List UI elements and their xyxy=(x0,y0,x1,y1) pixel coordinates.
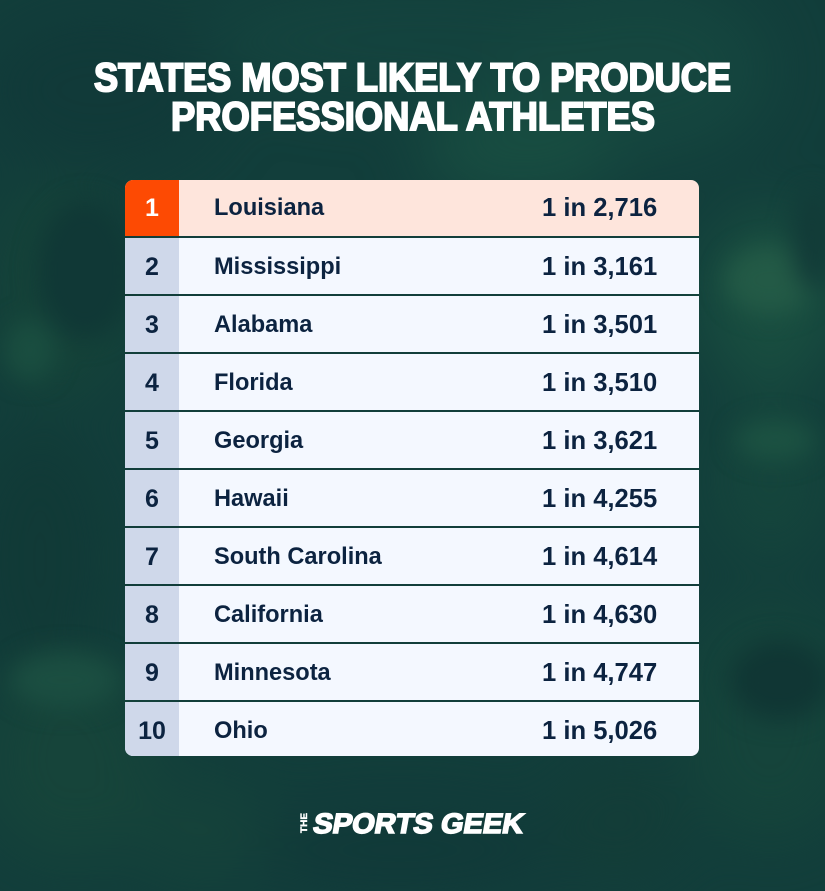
row 5: Georgia xyxy=(125,412,699,468)
row 4: Florida: Florida xyxy=(214,370,293,396)
row 4: Florida: 4 xyxy=(145,369,159,397)
row 10: Ohio: 1 in 5,026 xyxy=(542,717,657,745)
row 8: California xyxy=(125,586,699,642)
row 6: Hawaii xyxy=(125,470,699,526)
row 9: Minnesota: Minnesota xyxy=(214,660,331,686)
row 8: California: 1 in 4,630 xyxy=(542,601,657,629)
row 10: Ohio xyxy=(125,702,699,756)
row 5: Georgia: 1 in 3,621 xyxy=(542,427,657,455)
row 2: Mississippi: Mississippi xyxy=(214,254,341,280)
row 2: Mississippi xyxy=(125,238,699,294)
row 3: Alabama: Alabama xyxy=(214,312,312,338)
row 10: Ohio: 10 xyxy=(138,717,166,745)
row 7: South Carolina: South Carolina xyxy=(214,544,382,570)
title: PROFESSIONAL ATHLETES xyxy=(171,95,655,139)
row 6: Hawaii: 6 xyxy=(145,485,159,513)
logo: The Sports Geek: THE xyxy=(299,813,309,833)
row 1: Louisiana: 1 xyxy=(145,194,159,222)
row 8: California: 8 xyxy=(145,601,159,629)
row 6: Hawaii: 1 in 4,255 xyxy=(542,485,657,513)
row 8: California: California xyxy=(214,602,323,628)
row 4: Florida: 1 in 3,510 xyxy=(542,369,657,397)
ranking table xyxy=(125,180,699,756)
row 1: Louisiana xyxy=(125,180,699,236)
logo: The Sports Geek: SPORTS GEEK xyxy=(311,807,527,839)
title: STATES MOST LIKELY TO PRODUCE xyxy=(94,56,731,100)
row 4: Florida xyxy=(125,354,699,410)
row 3: Alabama: 1 in 3,501 xyxy=(542,311,657,339)
row 6: Hawaii: Hawaii xyxy=(214,486,289,512)
row 9: Minnesota: 1 in 4,747 xyxy=(542,659,657,687)
row 9: Minnesota xyxy=(125,644,699,700)
row 7: South Carolina: 1 in 4,614 xyxy=(542,543,657,571)
row 7: South Carolina xyxy=(125,528,699,584)
row 10: Ohio: Ohio xyxy=(214,718,268,744)
row 2: Mississippi: 2 xyxy=(145,253,159,281)
row 1: Louisiana: 1 in 2,716 xyxy=(542,194,657,222)
row 9: Minnesota: 9 xyxy=(145,659,159,687)
row 7: South Carolina: 7 xyxy=(145,543,159,571)
row 1: Louisiana: Louisiana xyxy=(214,195,324,221)
row 5: Georgia: 5 xyxy=(145,427,159,455)
row 5: Georgia: Georgia xyxy=(214,428,303,454)
row 2: Mississippi: 1 in 3,161 xyxy=(542,253,657,281)
row 3: Alabama xyxy=(125,296,699,352)
row 3: Alabama: 3 xyxy=(145,311,159,339)
